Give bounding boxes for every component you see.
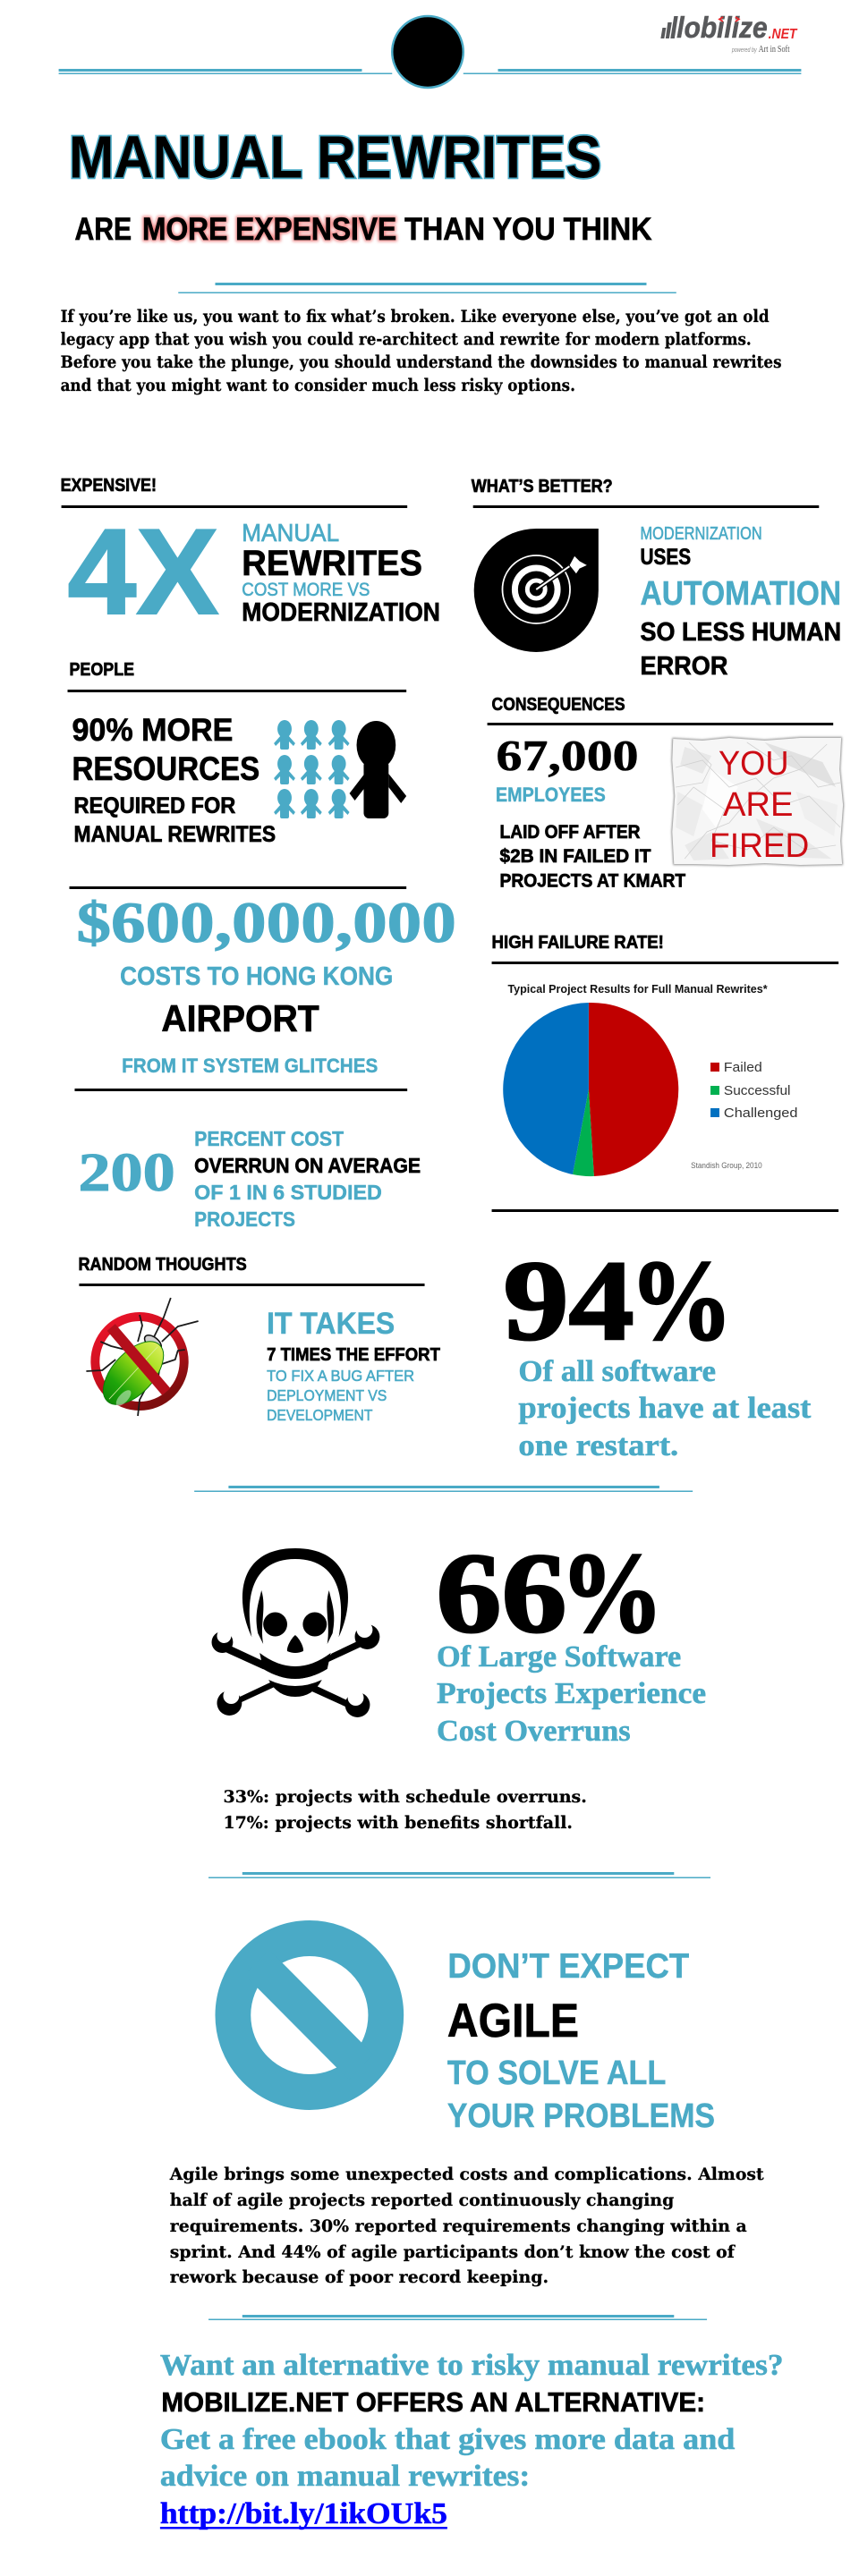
pie chart: typical project results <box>503 983 797 1176</box>
text: don't expect agile: AGILE <box>447 1995 579 2047</box>
call to action: Want an alternative to risky manual rewrites? <box>160 2349 784 2382</box>
text: agile paragraph <box>169 2165 764 2287</box>
text: don't expect agile <box>447 1947 715 2135</box>
stat description: Cost Overruns <box>437 1715 631 1748</box>
image: crumpled paper, you are fired: FIRED <box>710 827 809 865</box>
icon: target with arrow <box>474 529 599 652</box>
text: laid off: PROJECTS AT KMART <box>500 870 685 892</box>
title: MANUAL REWRITES <box>69 124 601 191</box>
text: don't expect agile: YOUR PROBLEMS <box>447 2097 715 2135</box>
text: it takes 7 times the effort: DEVELOPMENT <box>267 1406 372 1424</box>
intro text <box>61 307 782 395</box>
panel: what's better <box>472 477 841 681</box>
stat description <box>194 1127 421 1231</box>
text: airport: AIRPORT <box>161 997 319 1039</box>
text: agile paragraph: rework because of poor record keeping. <box>170 2267 549 2287</box>
big stat: 66%: 66 <box>436 1530 567 1657</box>
text: laid off <box>500 822 685 892</box>
big stat: 94%: 94 <box>503 1237 634 1364</box>
text: agile paragraph: Agile brings some unexpected costs and complications. Almost <box>169 2165 764 2184</box>
call to action: http://bit.ly/1ikOUk5 <box>160 2497 447 2530</box>
icon: no bugs <box>86 1298 199 1416</box>
big stat: 4X: 4X <box>68 504 218 640</box>
supporting stats: 17%: projects with benefits shortfall. <box>223 1813 573 1833</box>
pie chart: typical project results: Successful <box>724 1083 790 1098</box>
heading: consequences: CONSEQUENCES <box>492 695 625 715</box>
stat description <box>242 519 440 627</box>
stat: 67,000 employees: EMPLOYEES <box>496 784 606 806</box>
text: 90% more resources: 90% MORE <box>72 713 233 748</box>
stat description: Projects Experience <box>437 1677 706 1710</box>
text: it takes 7 times the effort: IT TAKES <box>267 1307 395 1341</box>
panel: airport cost <box>70 886 456 1091</box>
image: crumpled paper, you are fired <box>671 737 844 866</box>
panel: expensive <box>61 476 440 640</box>
pie chart: typical project results: Typical Project Results for Full Manual Rewrites* <box>507 983 768 996</box>
stat description: Of all software <box>518 1355 716 1388</box>
subtitle: MORE EXPENSIVE <box>142 212 396 247</box>
stat description: REWRITES <box>242 544 422 583</box>
logo: Mobilize.NET <box>660 11 798 55</box>
image: crumpled paper, you are fired: YOU <box>719 745 788 783</box>
stat description: OF 1 IN 6 STUDIED <box>194 1181 382 1204</box>
call to action: MOBILIZE.NET OFFERS AN ALTERNATIVE: <box>161 2386 705 2418</box>
pie chart: typical project results: Failed <box>724 1060 762 1075</box>
text: 90% more resources <box>72 713 276 847</box>
text: it takes 7 times the effort: 7 TIMES THE EFFORT <box>267 1345 440 1365</box>
icon: prohibition sign <box>233 1938 386 2092</box>
text: laid off: $2B IN FAILED IT <box>500 846 651 867</box>
stat description: PROJECTS <box>194 1208 295 1231</box>
big stat: 94%: % <box>630 1237 733 1364</box>
icon: small blue people <box>274 720 350 818</box>
pie chart: typical project results: Standish Group, 2010 <box>691 1161 762 1171</box>
icon: large black person <box>350 721 406 818</box>
heading: random thoughts: RANDOM THOUGHTS <box>78 1255 247 1275</box>
stat description <box>518 1355 812 1462</box>
text: it takes 7 times the effort: TO FIX A BUG AFTER <box>267 1367 414 1385</box>
big stat: 66% <box>436 1530 663 1657</box>
description: USES <box>641 545 691 570</box>
intro text: If you’re like us, you want to fix what’s broken. Like everyone else, you’ve got an old <box>61 307 770 326</box>
logo: Mobilize.NET: lobilize <box>676 11 768 44</box>
text: it takes 7 times the effort: DEPLOYMENT VS <box>267 1386 387 1404</box>
supporting stats <box>223 1787 587 1833</box>
stat description <box>437 1640 706 1748</box>
description: MODERNIZATION <box>641 524 762 544</box>
stat description: projects have at least <box>518 1392 812 1425</box>
description <box>641 524 841 681</box>
text: agile paragraph: requirements. 30% reported requirements changing within a <box>170 2216 747 2236</box>
heading: what's better: WHAT’S BETTER? <box>472 477 613 496</box>
logo: Mobilize.NET: powered by <box>731 47 757 54</box>
stat description: PERCENT COST <box>194 1127 344 1150</box>
panel: random thoughts <box>78 1255 440 1424</box>
text: don't expect agile: DON’T EXPECT <box>447 1947 689 1986</box>
icon: skull and crossbones <box>212 1548 379 1717</box>
big stat: 66%: % <box>560 1530 663 1657</box>
subtitle: MORE EXPENSIVE <box>142 212 396 247</box>
description: SO LESS HUMAN <box>641 618 841 647</box>
panel: 200 percent overrun <box>78 1127 421 1231</box>
intro text: Before you take the plunge, you should understand the downsides to manual rewrites <box>61 352 782 372</box>
stat description: MODERNIZATION <box>242 598 440 627</box>
supporting stats: 33%: projects with schedule overruns. <box>223 1787 587 1807</box>
header ornament: rules and black circle <box>59 16 801 88</box>
image: crumpled paper, you are fired: ARE <box>723 786 793 824</box>
description: ERROR <box>641 652 728 681</box>
subtitle <box>74 212 651 247</box>
intro text: and that you might want to consider much less risky options. <box>61 376 575 395</box>
panel: agile <box>169 1938 764 2287</box>
text: agile paragraph: sprint. And 44% of agile participants don’t know the cost of <box>170 2242 736 2262</box>
subtitle: ARE <box>74 212 132 247</box>
text: from it system glitches: FROM IT SYSTEM GLITCHES <box>122 1055 378 1077</box>
text: it takes 7 times the effort <box>267 1307 440 1424</box>
panel: 66 percent cost overruns <box>212 1530 706 1833</box>
heading: expensive: EXPENSIVE! <box>61 476 157 496</box>
big stat: $600,000,000: $600,000,000 <box>76 891 456 955</box>
logo: Mobilize.NET: .NET <box>769 27 798 42</box>
text: laid off: LAID OFF AFTER <box>500 822 641 843</box>
stat: 67,000 employees <box>496 731 639 806</box>
panel: high failure rate <box>492 933 838 1212</box>
stat description: MANUAL <box>242 519 339 547</box>
panel: consequences <box>488 695 844 892</box>
stat description: one restart. <box>518 1429 678 1462</box>
stat description: OVERRUN ON AVERAGE <box>194 1154 421 1177</box>
pie chart: typical project results: Challenged <box>724 1106 797 1121</box>
big stat: 94% <box>503 1237 733 1364</box>
call to action: Get a free ebook that gives more data and <box>160 2423 736 2456</box>
text: 90% more resources: REQUIRED FOR <box>73 793 235 818</box>
call to action: advice on manual rewrites: <box>160 2460 530 2493</box>
text: 90% more resources: MANUAL REWRITES <box>73 822 276 847</box>
heading: people: PEOPLE <box>70 660 134 680</box>
call to action <box>160 2349 784 2530</box>
panel: people <box>68 660 406 847</box>
text: don't expect agile: TO SOLVE ALL <box>447 2055 666 2092</box>
logo: Mobilize.NET: Art in Soft <box>759 44 789 55</box>
intro text: legacy app that you wish you could re-architect and rewrite for modern platforms. <box>61 329 752 350</box>
stat: 67,000 employees: 67,000 <box>497 731 639 780</box>
big stat: 200: 200 <box>78 1143 175 1203</box>
subtitle: THAN YOU THINK <box>404 212 651 247</box>
stat description: Of Large Software <box>437 1640 681 1674</box>
heading: high failure rate: HIGH FAILURE RATE! <box>492 933 664 953</box>
text: 90% more resources: RESOURCES <box>72 750 259 787</box>
stat description: COST MORE VS <box>242 580 370 600</box>
text: agile paragraph: half of agile projects reported continuously changing <box>170 2190 674 2210</box>
panel: 94 percent restart <box>503 1237 812 1462</box>
text: costs to hong kong: COSTS TO HONG KONG <box>120 962 393 991</box>
